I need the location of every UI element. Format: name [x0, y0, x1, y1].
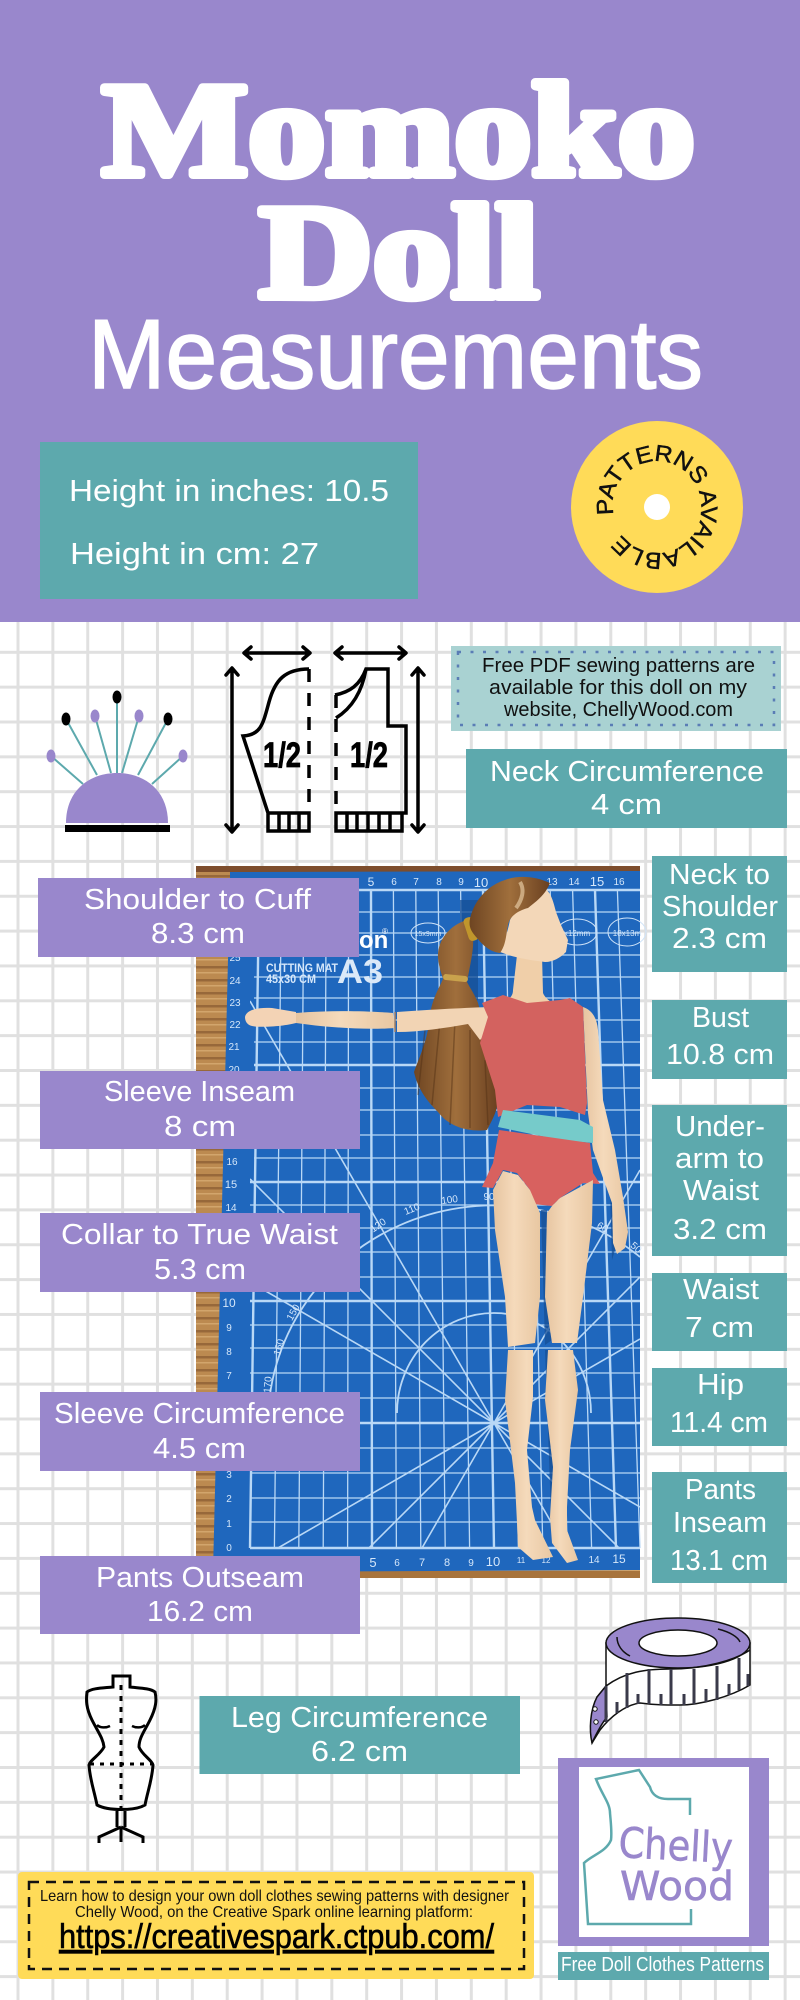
logo: Chelly Wood: Wood	[620, 1864, 734, 1910]
hair cap	[470, 877, 550, 953]
ruler numbers: 8	[226, 1347, 232, 1358]
waistband	[498, 1110, 593, 1143]
label: neck to shoulder: Shoulder	[662, 891, 778, 923]
label: waist: 7 cm	[685, 1312, 754, 1344]
icon: measuring tape	[590, 1618, 750, 1743]
ruler numbers: 0	[226, 1543, 232, 1554]
ponytail	[414, 916, 498, 1130]
mat lettering: A3	[337, 953, 383, 991]
ruler numbers: 20	[228, 1065, 240, 1076]
callout: creative spark: Learn how to design your own doll clothes sewing patterns with designer	[40, 1888, 510, 1905]
badge: patterns available: PATTERNS AVAILABLE	[596, 444, 718, 570]
label: free doll clothes patterns: Free Doll Clothes Patterns	[561, 1954, 764, 1976]
ruler numbers: 7	[226, 1371, 232, 1382]
label: underarm to waist: arm to	[675, 1143, 764, 1175]
ruler numbers: 8	[444, 1557, 450, 1569]
ruler numbers: 13	[546, 877, 558, 888]
label: pants inseam: 13.1 cm	[670, 1545, 768, 1577]
ruler numbers: 50	[628, 1240, 644, 1256]
face	[500, 888, 568, 962]
right arm	[583, 1007, 628, 1254]
ruler numbers: 6	[391, 877, 397, 888]
label: sleeve circumference	[40, 1392, 360, 1471]
title: Momoko Doll: Momoko	[102, 56, 695, 204]
label: underarm to waist	[652, 1105, 787, 1256]
bodice top	[480, 995, 587, 1117]
ruler numbers: 2	[226, 1494, 232, 1505]
ruler numbers: 9	[468, 1558, 474, 1569]
label: sleeve circumference: 4.5 cm	[153, 1433, 246, 1465]
label: pants inseam: Pants	[685, 1474, 756, 1506]
label: sleeve circumference: Sleeve Circumference	[54, 1398, 345, 1430]
cutting mat	[213, 871, 646, 1572]
badge: patterns available	[571, 421, 743, 593]
label: waist	[652, 1273, 787, 1351]
mat lettering: CUTTING MAT	[266, 963, 338, 975]
label: bust: 10.8 cm	[666, 1039, 774, 1071]
ruler numbers: 21	[228, 1042, 240, 1053]
label: neck circumference	[466, 749, 787, 828]
ruler numbers: 22	[229, 1020, 241, 1031]
ruler numbers: 25	[229, 953, 241, 964]
label: collar to true waist	[40, 1213, 360, 1292]
label: hip: Hip	[697, 1369, 744, 1401]
ruler numbers: 14	[225, 1203, 237, 1214]
cutting mat: x12mm	[564, 929, 590, 938]
bodice piece	[335, 669, 406, 831]
logo: Chelly Wood: Chelly	[617, 1818, 734, 1873]
neck	[505, 955, 556, 1008]
icon: half sewing pattern pieces	[226, 647, 424, 832]
ruler numbers: 9	[226, 1323, 232, 1334]
label: underarm to waist: Waist	[683, 1175, 759, 1207]
label: leg circumference: Leg Circumference	[231, 1702, 488, 1734]
height panel	[40, 442, 418, 599]
ruler numbers: 110	[403, 1201, 422, 1218]
ruler numbers: 1	[226, 1519, 232, 1530]
ruler numbers: 16	[613, 877, 625, 888]
sleeve piece	[243, 669, 309, 831]
cutting mat: 18x13m	[613, 929, 642, 938]
vertical rulings	[274, 890, 640, 1548]
label: neck to shoulder	[652, 856, 787, 972]
callout: free pdf patterns: available for this doll on my	[489, 677, 747, 699]
ruler numbers: 10	[486, 1554, 500, 1569]
ruler numbers: 3	[226, 1470, 232, 1481]
callout: creative spark: Chelly Wood, on the Creative Spark online learning platform:	[75, 1904, 473, 1921]
wood table	[196, 866, 640, 1578]
mat lettering	[266, 927, 388, 991]
callout: free pdf patterns: website, ChellyWood.com	[503, 699, 733, 721]
ruler numbers: 8	[436, 877, 442, 888]
ruler numbers: 150	[285, 1302, 303, 1323]
ruler numbers: 11	[517, 1556, 526, 1565]
label: sleeve inseam	[40, 1071, 360, 1149]
title: Momoko Doll	[102, 56, 695, 326]
label: sleeve inseam: Sleeve Inseam	[104, 1076, 295, 1108]
ruler numbers: 9	[458, 877, 464, 888]
doll figure	[245, 877, 628, 1563]
ruler numbers: 5	[368, 875, 375, 889]
label: hip: 11.4 cm	[670, 1407, 768, 1439]
ruler numbers: 10	[474, 875, 488, 890]
hand and sleeve arm	[245, 1007, 500, 1040]
label: pants inseam: Inseam	[673, 1507, 767, 1539]
ruler numbers: 14	[568, 877, 580, 888]
ruler numbers: 90	[483, 1192, 495, 1203]
icon: dress form	[87, 1676, 156, 1843]
callout: creative spark	[18, 1872, 534, 1979]
label: leg circumference: 6.2 cm	[311, 1736, 408, 1768]
horizontal rulings	[250, 912, 640, 1522]
ruler numbers: 24	[229, 976, 241, 987]
label: shoulder to cuff	[38, 878, 359, 957]
photo: doll on cutting mat	[196, 866, 646, 1578]
ruler numbers: 6	[394, 1558, 400, 1569]
icon: pincushion	[46, 690, 188, 832]
height panel: Height in cm: 27	[70, 536, 319, 571]
ruler numbers: 7	[413, 877, 419, 888]
ruler numbers: 12	[542, 1556, 551, 1565]
mat lettering: 45x30 CM	[266, 974, 316, 986]
icon: half sewing pattern pieces: 1/2	[263, 736, 301, 775]
ruler numbers: 14	[588, 1555, 600, 1566]
label: neck to shoulder: Neck to	[669, 859, 770, 891]
ruler numbers: 15	[590, 874, 604, 889]
label: bust	[652, 1000, 787, 1079]
ruler numbers	[222, 874, 644, 1570]
ruler numbers: 100	[441, 1194, 459, 1207]
legs	[493, 1171, 593, 1563]
label: shoulder to cuff: 8.3 cm	[151, 918, 245, 950]
ruler numbers: 160	[272, 1337, 287, 1357]
ruler numbers: 15	[612, 1552, 626, 1566]
callout: free pdf patterns	[451, 646, 781, 731]
label: pants inseam	[652, 1472, 787, 1583]
ruler numbers: 120	[369, 1216, 389, 1235]
cutting mat: 15x9mm	[415, 931, 442, 938]
height panel: Height in inches: 10.5	[69, 473, 389, 508]
label: pants outseam	[40, 1556, 360, 1634]
arrows	[226, 647, 424, 832]
label: neck to shoulder: 2.3 cm	[672, 923, 767, 955]
label: bust: Bust	[692, 1002, 749, 1034]
callout: creative spark: https://creativespark.ctpub.com/	[59, 1918, 495, 1956]
ruler numbers: 170	[262, 1376, 275, 1394]
radial lines	[250, 1001, 640, 1548]
mat lettering: on	[359, 927, 388, 954]
label: neck circumference: Neck Circumference	[490, 756, 764, 788]
label: pants outseam: 16.2 cm	[147, 1596, 253, 1628]
ruler numbers: 23	[229, 998, 241, 1009]
label: neck circumference: 4 cm	[591, 789, 662, 821]
header panel	[0, 0, 800, 622]
ruler numbers: 10	[222, 1296, 236, 1310]
ruler numbers: 60	[595, 1220, 610, 1236]
label: leg circumference	[200, 1696, 520, 1774]
title: Momoko Doll: Doll	[259, 178, 539, 326]
mat lettering: ®	[382, 927, 388, 936]
label: collar to true waist: Collar to True Waist	[61, 1219, 338, 1251]
label: underarm to waist: Under-	[675, 1111, 765, 1143]
subtitle: Measurements: Measurements	[88, 299, 703, 409]
logo: Chelly Wood	[558, 1758, 769, 1946]
label: sleeve inseam: 8 cm	[164, 1111, 236, 1143]
label: waist: Waist	[683, 1274, 759, 1306]
label: shoulder to cuff: Shoulder to Cuff	[84, 884, 312, 916]
label: collar to true waist: 5.3 cm	[154, 1254, 246, 1286]
icon: half sewing pattern pieces: 1/2	[350, 736, 388, 775]
label: underarm to waist: 3.2 cm	[673, 1214, 767, 1246]
ruler numbers: 5	[369, 1555, 377, 1570]
ruler numbers: 15	[225, 1179, 237, 1191]
label: pants outseam: Pants Outseam	[96, 1562, 304, 1594]
callout: free pdf patterns: Free PDF sewing patterns are	[482, 655, 755, 677]
ruler numbers: 7	[419, 1557, 425, 1569]
label: hip	[652, 1368, 787, 1446]
cast shadow	[460, 900, 618, 1545]
briefs	[482, 1130, 600, 1206]
ruler numbers: 16	[226, 1157, 238, 1168]
